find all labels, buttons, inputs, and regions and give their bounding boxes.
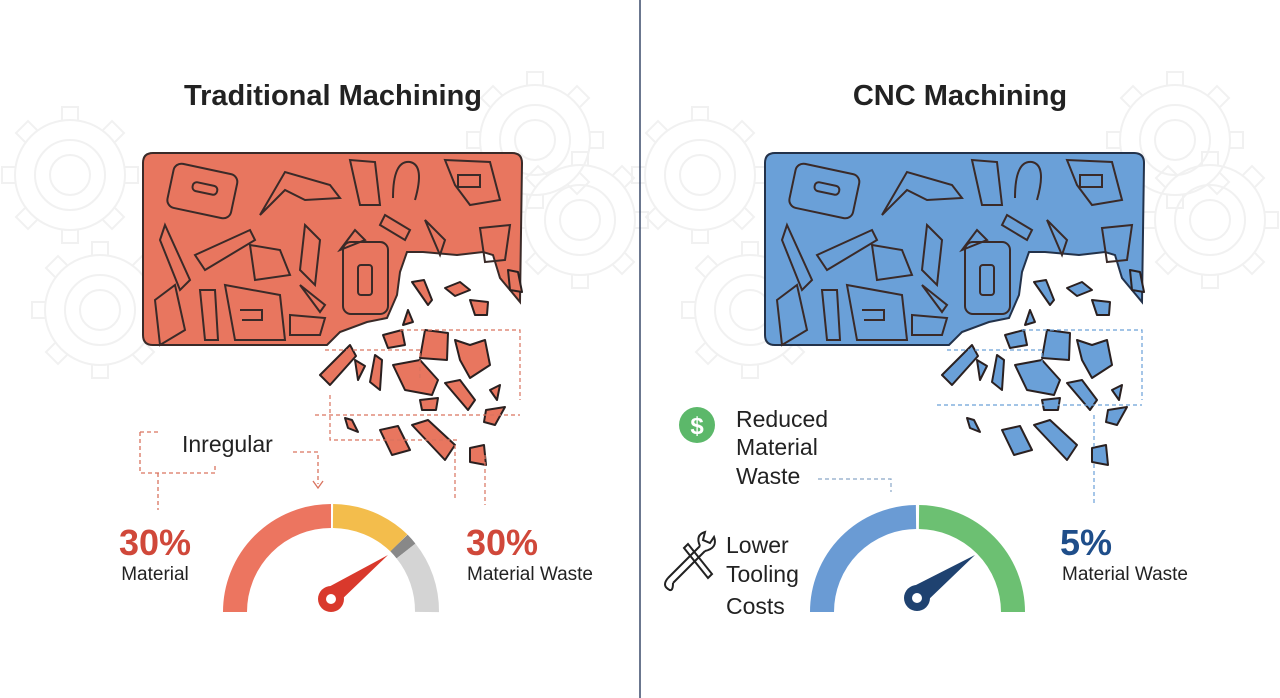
stat: 5% Material Waste: 5% <box>1060 522 1112 563</box>
callout: Reduced Material Waste: Material <box>736 434 818 460</box>
title: Traditional Machining: Traditional Machining <box>184 80 482 112</box>
stat: 30% Material: 30% <box>119 522 191 563</box>
icon: dollar: $ <box>690 413 704 440</box>
gauge: traditional <box>235 516 427 612</box>
stat: 30% Material <box>119 522 191 585</box>
panel: traditional material block <box>143 153 522 505</box>
title: CNC Machining: CNC Machining <box>853 80 1067 112</box>
stat: 5% Material Waste: Material Waste <box>1062 564 1188 585</box>
callout: Reduced Material Waste: Waste <box>736 463 800 489</box>
callout: Inregular: Inregular <box>182 431 273 457</box>
divider line <box>639 0 641 698</box>
background gears <box>2 72 1278 378</box>
stat: 30% Material Waste <box>466 522 593 585</box>
icon: dollar <box>679 407 715 443</box>
gauge needle: CNC <box>904 555 975 611</box>
callout: Inregular <box>140 431 323 510</box>
stat: 30% Material Waste: 30% <box>466 522 538 563</box>
fragments: red <box>320 270 522 465</box>
callout: Lower Tooling Costs <box>665 532 799 619</box>
stat: 30% Material: Material <box>121 564 189 585</box>
gauge: CNC <box>822 517 1013 612</box>
stat: 5% Material Waste <box>1060 522 1188 585</box>
callout: Reduced Material Waste <box>679 406 891 492</box>
gauge needle: traditional <box>318 555 388 612</box>
stat: 30% Material Waste: Material Waste <box>467 564 593 585</box>
callout: Lower Tooling Costs: Lower <box>726 532 789 558</box>
callout: Lower Tooling Costs: Costs <box>726 593 785 619</box>
icon: wrench <box>665 532 715 590</box>
callout: Reduced Material Waste: Reduced <box>736 406 828 432</box>
panel: CNC material block <box>765 153 1144 505</box>
callout: Lower Tooling Costs: Tooling <box>726 561 799 587</box>
fragments: blue <box>942 270 1144 465</box>
